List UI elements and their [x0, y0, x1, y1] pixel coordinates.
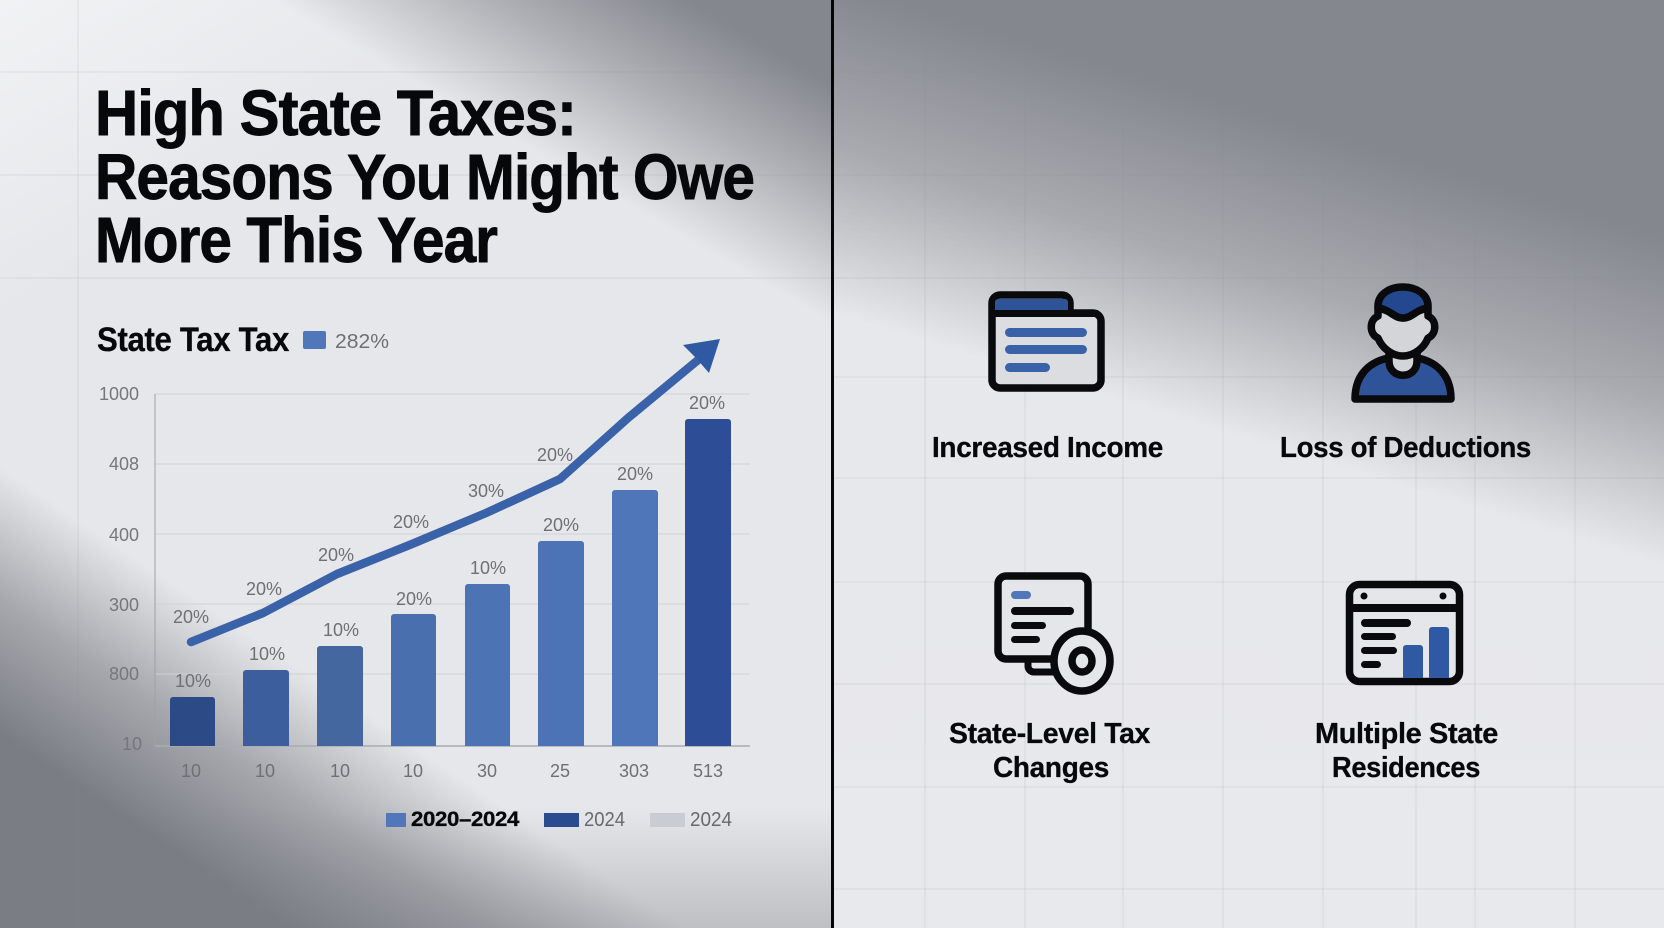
- y axis labels: 300: [109, 595, 139, 615]
- bar value labels: 10%: [249, 644, 285, 664]
- x axis labels: 10: [255, 761, 275, 781]
- chart key: 282%: [335, 331, 389, 353]
- trend arrow: [191, 339, 720, 642]
- bar value labels: [175, 393, 725, 691]
- title: [95, 77, 754, 276]
- chart heading: State Tax Tax: [97, 321, 289, 359]
- x axis labels: 30: [477, 761, 497, 781]
- label: Changes: [993, 752, 1109, 784]
- icon: folder: [992, 295, 1101, 388]
- legend: 2024: [584, 809, 625, 831]
- trend value labels: [173, 445, 573, 627]
- y axis labels: 408: [109, 454, 139, 474]
- icon: person: [1355, 287, 1451, 399]
- label: [949, 718, 1150, 784]
- chart: state tax bars and trend: [97, 321, 750, 831]
- bar value labels: 10%: [323, 620, 359, 640]
- icon: dashboard window: [1350, 584, 1460, 682]
- panel: right background: [834, 0, 1664, 928]
- y axis labels: 10: [122, 734, 142, 754]
- reason: increased income: [932, 295, 1163, 464]
- legend: 2020–2024: [411, 808, 520, 831]
- bar value labels: 10%: [470, 558, 506, 578]
- icon: document with gear: [998, 576, 1110, 691]
- gridlines and axes: [155, 394, 750, 746]
- legend: 2024: [690, 809, 732, 831]
- x axis labels: [181, 761, 723, 781]
- label: Residences: [1332, 752, 1480, 784]
- label: State-Level Tax: [949, 718, 1150, 750]
- panel: left background: [0, 0, 832, 928]
- y axis labels: 400: [109, 525, 139, 545]
- trend value labels: 20%: [246, 579, 282, 599]
- x axis labels: 10: [403, 761, 423, 781]
- y axis labels: 800: [109, 664, 139, 684]
- reason: state-level tax changes: [949, 576, 1150, 784]
- chart key: [303, 331, 389, 353]
- x axis labels: 303: [619, 761, 649, 781]
- title: High State Taxes:: [95, 77, 576, 149]
- y axis labels: 1000: [99, 384, 139, 404]
- reason: multiple state residences: [1315, 584, 1498, 784]
- bar value labels: 10%: [175, 671, 211, 691]
- bar value labels: 20%: [689, 393, 725, 413]
- trend value labels: 30%: [468, 481, 504, 501]
- reason: loss of deductions: [1280, 287, 1531, 464]
- label: Increased Income: [932, 432, 1163, 464]
- y axis labels: [99, 384, 142, 754]
- x axis labels: 10: [181, 761, 201, 781]
- title: Reasons You Might Owe: [95, 141, 754, 213]
- trend value labels: 20%: [173, 607, 209, 627]
- label: [1315, 718, 1498, 784]
- label: Multiple State: [1315, 718, 1498, 750]
- x axis labels: 10: [330, 761, 350, 781]
- trend value labels: 20%: [537, 445, 573, 465]
- title: More This Year: [95, 204, 497, 276]
- divider: [831, 0, 834, 928]
- bar value labels: 20%: [617, 464, 653, 484]
- legend: [386, 808, 732, 831]
- bar value labels: 20%: [543, 515, 579, 535]
- x axis labels: 25: [550, 761, 570, 781]
- bar value labels: 20%: [396, 589, 432, 609]
- x axis labels: 513: [693, 761, 723, 781]
- trend value labels: 20%: [393, 512, 429, 532]
- bars: [170, 419, 731, 746]
- trend value labels: 20%: [318, 545, 354, 565]
- label: Loss of Deductions: [1280, 432, 1531, 464]
